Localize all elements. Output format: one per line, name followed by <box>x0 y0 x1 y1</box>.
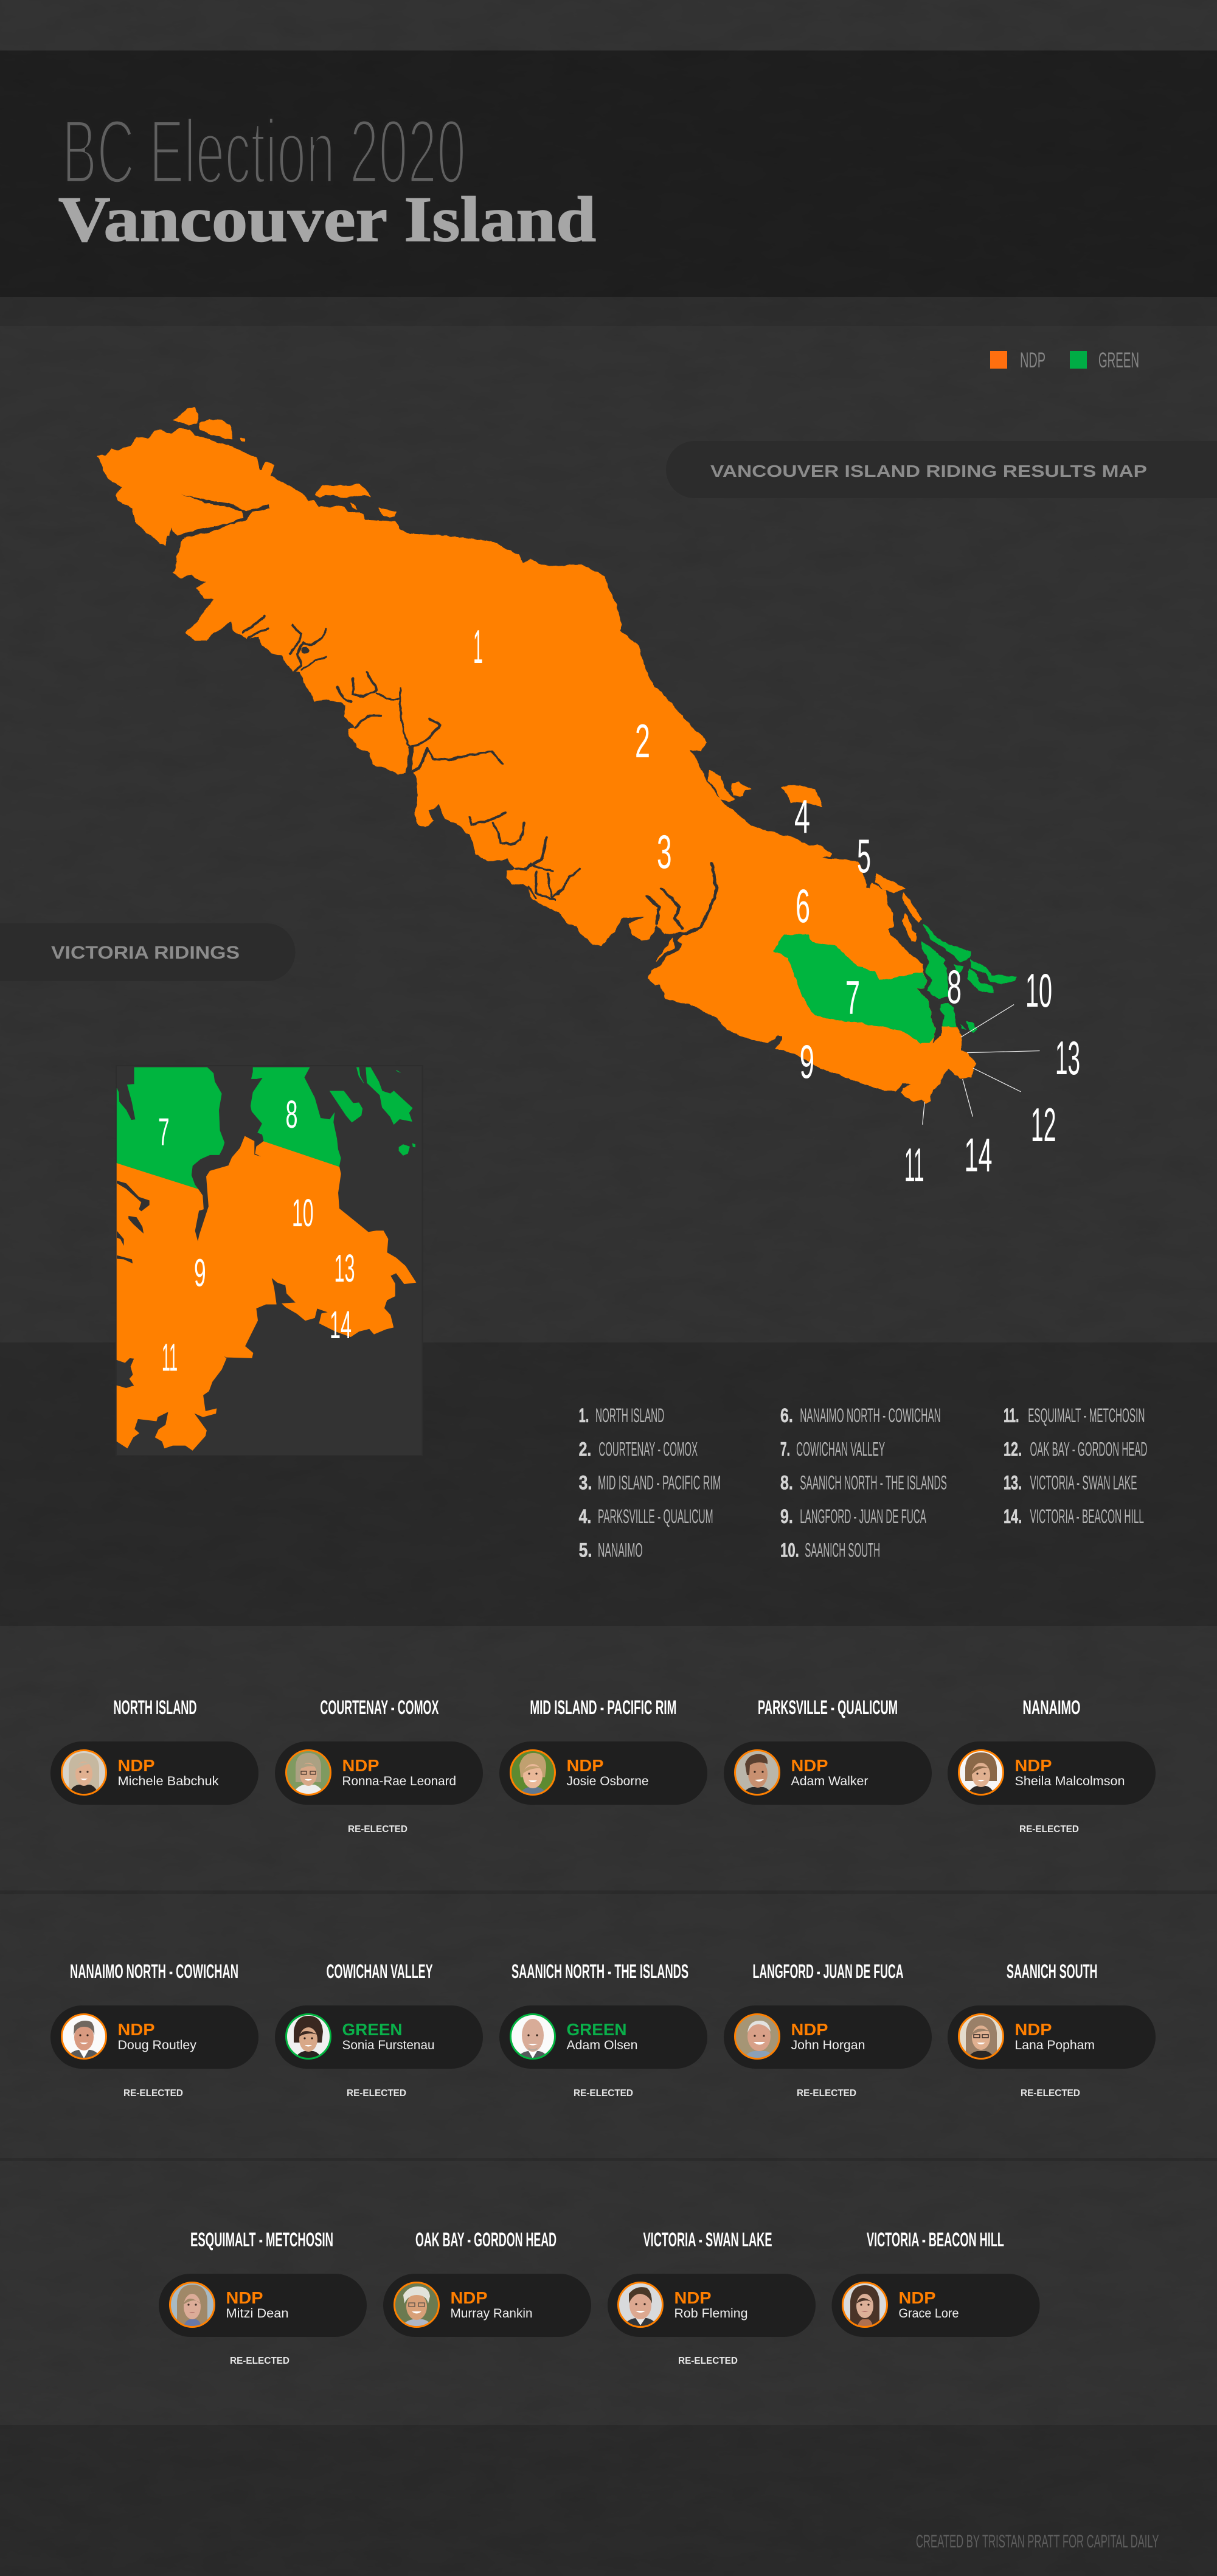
small islands off the north coast <box>173 408 198 425</box>
riding name list: 14. <box>1004 1505 1022 1527</box>
candidate card: Parksville - Qualicum: Adam Walker <box>791 1774 869 1788</box>
Victoria ridings inset map: 13 <box>335 1246 355 1290</box>
candidate card: Victoria - Swan Lake: Rob Fleming <box>674 2307 748 2321</box>
candidate card: Mid Island - Pacific Rim <box>499 1696 707 1805</box>
candidate card: Mid Island - Pacific Rim: NDP <box>567 1756 603 1775</box>
map heading pill <box>666 441 1217 498</box>
title line: BC Election 2020: BC Election 2020 <box>62 100 466 203</box>
riding name list: 4. <box>579 1505 591 1527</box>
candidate card: Nanaimo: NANAIMO <box>1023 1696 1080 1718</box>
inset riding numbers: 8 <box>286 1092 298 1136</box>
portrait: Michele Babchuk <box>61 1749 107 1797</box>
candidate card: Saanich South: NDP <box>1014 2020 1052 2039</box>
candidate card: Parksville - Qualicum <box>724 1696 932 1805</box>
candidate card: Cowichan Valley: COWICHAN VALLEY <box>327 1960 433 1982</box>
candidate card: Saanich North - The Islands: Adam Olsen <box>567 2038 637 2052</box>
re-elected note: RE-ELECTED <box>1019 1824 1079 1835</box>
map riding numbers: 10 <box>1025 963 1052 1017</box>
riding name list: MID ISLAND - PACIFIC RIM <box>598 1472 721 1494</box>
candidate card: Mid Island - Pacific Rim: Josie Osborne <box>567 1774 648 1788</box>
portrait: Sheila Malcolmson <box>958 1749 1004 1797</box>
portrait: Doug Routley <box>61 2013 107 2061</box>
Victoria ridings inset map <box>116 1066 423 1456</box>
riding name list: 10. <box>780 1539 799 1561</box>
inset: green ridings <box>117 1068 415 1189</box>
map riding numbers: 12 <box>1031 1098 1056 1151</box>
candidate card: Nanaimo North - Cowichan <box>50 1960 258 2099</box>
riding name list: COURTENAY - COMOX <box>598 1438 698 1460</box>
candidate card: Victoria - Swan Lake: VICTORIA - SWAN LAKE <box>643 2229 772 2251</box>
map riding numbers <box>473 620 1080 1192</box>
fjords on the west coast <box>170 494 580 900</box>
portrait: Rob Fleming <box>617 2282 664 2329</box>
riding name list: 13. <box>1004 1472 1022 1494</box>
map riding numbers: 3 <box>657 825 671 878</box>
riding name list: NANAIMO <box>598 1539 643 1561</box>
portrait: Grace Lore <box>842 2282 888 2329</box>
riding name list <box>579 1404 1147 1561</box>
candidate card: Saanich South <box>948 1960 1156 2099</box>
candidate card: Oak Bay - Gordon Head: Murray Rankin <box>450 2307 533 2321</box>
header band <box>0 50 1217 297</box>
candidate card: Saanich South: SAANICH SOUTH <box>1007 1960 1097 1982</box>
candidate card: Victoria - Beacon Hill: VICTORIA - BEACON HILL <box>867 2229 1004 2251</box>
Vancouver Island riding map <box>98 408 1080 1192</box>
party legend: GREEN <box>1098 349 1139 372</box>
portrait: Murray Rankin <box>394 2282 440 2329</box>
leader lines <box>923 1005 1040 1125</box>
candidate card: Courtenay - Comox: COURTENAY - COMOX <box>320 1696 439 1718</box>
candidate card: Parksville - Qualicum: PARKSVILLE - QUALICUM <box>758 1696 898 1718</box>
portrait: Adam Walker <box>734 1749 780 1797</box>
riding name list: NANAIMO NORTH - COWICHAN <box>800 1404 941 1426</box>
riding name list: LANGFORD - JUAN DE FUCA <box>800 1505 926 1527</box>
island: north and central land <box>98 408 669 945</box>
portrait: Adam Olsen <box>510 2013 556 2061</box>
riding name list: NORTH ISLAND <box>595 1404 664 1426</box>
portrait: Josie Osborne <box>510 1749 556 1797</box>
re-elected note: RE-ELECTED <box>348 1824 407 1835</box>
candidate card: Langford - Juan de Fuca: John Horgan <box>791 2038 865 2052</box>
inset riding numbers: 7 <box>158 1110 170 1154</box>
riding name list: 6. <box>780 1404 793 1426</box>
candidate card: Saanich North - The Islands: GREEN <box>567 2020 626 2039</box>
re-elected note: RE-ELECTED <box>574 2088 633 2099</box>
candidate card: North Island: Michele Babchuk <box>118 1774 219 1788</box>
candidate card: Nanaimo <box>948 1696 1156 1835</box>
candidate card: Cowichan Valley: GREEN <box>342 2020 403 2039</box>
inset riding numbers: 14 <box>330 1303 352 1347</box>
island: south land and orange Gulf islands <box>608 701 1040 1125</box>
candidate card: Cowichan Valley <box>275 1960 483 2099</box>
candidate card: Langford - Juan de Fuca <box>724 1960 932 2099</box>
portrait: Sonia Furstenau <box>285 2013 331 2061</box>
candidate card: Esquimalt - Metchosin: ESQUIMALT - METCHOSIN <box>190 2229 333 2251</box>
candidate card: Saanich North - The Islands: SAANICH NORTH - THE ISLANDS <box>511 1960 688 1982</box>
candidate card: Esquimalt - Metchosin <box>159 2229 367 2366</box>
title line: Vancouver Island: Vancouver Island <box>58 184 596 255</box>
Green ridings: Cowichan Valley and Saanich North <box>774 925 1017 1043</box>
candidate card: Victoria - Beacon Hill: NDP <box>899 2288 935 2307</box>
riding name list: 5. <box>579 1539 592 1561</box>
riding name list: SAANICH NORTH - THE ISLANDS <box>800 1472 947 1494</box>
riding name list: 3. <box>579 1472 592 1494</box>
map riding numbers: 1 <box>473 620 483 673</box>
map riding numbers: 4 <box>794 790 810 843</box>
map riding numbers: 14 <box>965 1128 993 1181</box>
riding name list: 9. <box>780 1505 793 1527</box>
candidate card: Courtenay - Comox: Ronna-Rae Leonard <box>342 1774 456 1788</box>
candidate card: North Island: NORTH ISLAND <box>113 1696 197 1718</box>
riding name list: 11. <box>1004 1404 1019 1426</box>
candidate card: Victoria - Beacon Hill: Grace Lore <box>899 2307 959 2321</box>
candidate card: Courtenay - Comox: NDP <box>342 1756 380 1775</box>
re-elected note: RE-ELECTED <box>123 2088 183 2099</box>
candidate card: Victoria - Swan Lake: NDP <box>674 2288 712 2307</box>
candidate card: Nanaimo: NDP <box>1014 1756 1052 1775</box>
map riding numbers: 8 <box>947 960 962 1013</box>
candidate card: Victoria - Beacon Hill <box>832 2229 1040 2337</box>
inset: orange land <box>117 1136 416 1450</box>
map riding numbers: 9 <box>800 1035 814 1088</box>
candidate card: Saanich South: Lana Popham <box>1014 2038 1095 2052</box>
re-elected note: RE-ELECTED <box>1021 2088 1080 2099</box>
map riding numbers: 2 <box>635 714 650 768</box>
candidate card: Oak Bay - Gordon Head: NDP <box>450 2288 488 2307</box>
candidate card: Courtenay - Comox <box>275 1696 483 1835</box>
Victoria ridings heading pill <box>0 923 296 981</box>
riding name list: 1. <box>579 1404 589 1426</box>
inset riding numbers: 10 <box>292 1191 314 1235</box>
riding name list: PARKSVILLE - QUALICUM <box>598 1505 713 1527</box>
candidate card: Nanaimo North - Cowichan: NDP <box>118 2020 154 2039</box>
portrait: Ronna-Rae Leonard <box>285 1749 331 1797</box>
candidate card: Langford - Juan de Fuca: NDP <box>791 2020 828 2039</box>
riding name list: 2. <box>579 1438 591 1460</box>
candidate card: Esquimalt - Metchosin: NDP <box>226 2288 263 2307</box>
candidate card: Oak Bay - Gordon Head: OAK BAY - GORDON HEAD <box>415 2229 556 2251</box>
candidate card: North Island: NDP <box>118 1756 154 1775</box>
candidate card: Parksville - Qualicum: NDP <box>791 1756 828 1775</box>
inset riding numbers: 9 <box>194 1251 206 1295</box>
re-elected note: RE-ELECTED <box>347 2088 406 2099</box>
map riding numbers: 11 <box>904 1138 924 1192</box>
inset riding numbers <box>158 1092 355 1380</box>
riding name list: 12. <box>1004 1438 1022 1460</box>
re-elected note: RE-ELECTED <box>230 2356 290 2366</box>
portrait: Mitzi Dean <box>169 2282 215 2329</box>
riding name list: SAANICH SOUTH <box>805 1539 880 1561</box>
map riding numbers: 5 <box>857 829 871 883</box>
riding name list: 7. <box>780 1438 790 1460</box>
candidate card: Esquimalt - Metchosin: Mitzi Dean <box>226 2307 288 2321</box>
candidate card: Oak Bay - Gordon Head <box>383 2229 591 2337</box>
text: 13 <box>1055 1031 1080 1085</box>
candidate card: Mid Island - Pacific Rim: MID ISLAND - PACIFIC RIM <box>530 1696 676 1718</box>
candidate card: Nanaimo North - Cowichan: Doug Routley <box>118 2038 196 2052</box>
candidate card: Nanaimo North - Cowichan: NANAIMO NORTH - COWICHAN <box>70 1960 238 1982</box>
candidate card: North Island <box>50 1696 258 1805</box>
portrait: Lana Popham <box>958 2013 1004 2061</box>
re-elected note: RE-ELECTED <box>678 2356 738 2366</box>
candidate card: Nanaimo: Sheila Malcolmson <box>1014 1774 1125 1788</box>
portrait: John Horgan <box>734 2013 780 2061</box>
riding name list: COWICHAN VALLEY <box>796 1438 885 1460</box>
candidate card: Victoria - Swan Lake <box>608 2229 816 2366</box>
party legend <box>990 349 1139 372</box>
map riding numbers: 6 <box>796 879 810 932</box>
map riding numbers: 7 <box>845 971 860 1024</box>
Victoria ridings heading pill: VICTORIA RIDINGS <box>51 943 240 963</box>
map heading pill: VANCOUVER ISLAND RIDING RESULTS MAP <box>710 462 1147 481</box>
riding name list: 8. <box>780 1472 793 1494</box>
candidate card: Saanich North - The Islands <box>499 1960 707 2099</box>
title <box>58 100 596 255</box>
party legend: NDP <box>1020 349 1045 372</box>
re-elected note: RE-ELECTED <box>797 2088 856 2099</box>
candidate card: Cowichan Valley: Sonia Furstenau <box>342 2038 434 2052</box>
candidate card: Langford - Juan de Fuca: LANGFORD - JUAN DE FUCA <box>753 1960 904 1982</box>
inset riding numbers: 11 <box>162 1336 178 1380</box>
inset: west inlets <box>117 1181 150 1263</box>
